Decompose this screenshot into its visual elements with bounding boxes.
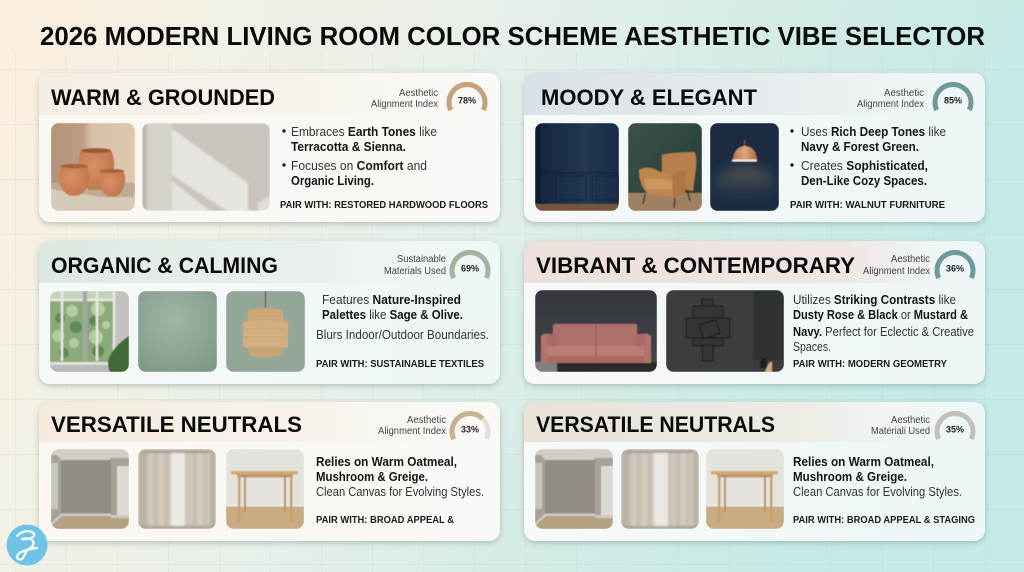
image: geometric wall art (666, 290, 784, 372)
text block: Palettes like Sage & Olive. (322, 308, 463, 322)
panel: vibrant & contemporary (524, 241, 985, 384)
gauge label: Aesthetic (407, 415, 446, 426)
text: bullets: Creates Sophisticated, (801, 159, 928, 173)
gauge label (378, 415, 446, 437)
text: bullets (282, 125, 437, 188)
text: bullets (790, 125, 946, 188)
pair with: PAIR WITH: MODERN GEOMETRY (793, 358, 947, 370)
image: empty room (51, 449, 129, 529)
gauge: 85%: 85% (944, 96, 962, 106)
panel: organic & calming (39, 241, 500, 384)
gauge: 33% (452, 413, 488, 439)
heading: VIBRANT & CONTEMPORARY (536, 253, 855, 278)
header band (524, 73, 985, 115)
pair with: PAIR WITH: BROAD APPEAL & STAGING (793, 514, 975, 526)
text block: Utilizes Striking Contrasts like (793, 293, 956, 307)
text block: Clean Canvas for Evolving Styles. (793, 485, 962, 499)
image: pendant lamp (710, 123, 779, 211)
gauge label: Alignment Index (863, 266, 930, 277)
gauge label (857, 88, 924, 110)
header band (524, 402, 985, 442)
icon: logo badge (6, 524, 48, 566)
panel: versatile neutrals right (524, 402, 985, 541)
text block: Spaces. (793, 340, 831, 354)
text block (793, 293, 974, 354)
gauge label: Aesthetic (884, 88, 924, 99)
gauge label (384, 254, 446, 277)
header band (39, 241, 500, 283)
text block: Clean Canvas for Evolving Styles. (316, 485, 484, 499)
panel: moody & elegant (524, 73, 985, 222)
title: 2026 MODERN LIVING ROOM COLOR SCHEME AESTHETIC VIBE SELECTOR (40, 23, 985, 51)
panel background (39, 241, 500, 384)
text block (316, 293, 489, 342)
text block: Relies on Warm Oatmeal, (316, 455, 457, 469)
image: empty room (535, 449, 613, 529)
gauge label (371, 88, 438, 110)
header band (524, 241, 985, 283)
text: bullets: Focuses on Comfort and (291, 159, 427, 173)
image: rattan pendant (226, 291, 305, 372)
image: sunlit wall (142, 123, 270, 211)
text: bullets: Navy & Forest Green. (801, 140, 919, 154)
gauge label: Alignment Index (378, 426, 446, 437)
gauge: 36% (937, 252, 973, 278)
gauge: 69% (452, 252, 488, 278)
text block: Dusty Rose & Black or Mustard & (793, 308, 968, 322)
gauge: 78% (449, 84, 485, 110)
image: terracotta pots (51, 123, 135, 211)
gauge: 36%: 36% (946, 264, 964, 274)
image: oak table (706, 449, 784, 529)
heading: MOODY & ELEGANT (541, 85, 757, 110)
image: oak table (226, 449, 304, 529)
heading: ORGANIC & CALMING (51, 253, 278, 278)
image: linen curtains (138, 449, 216, 529)
text block: Blurs Indoor/Outdoor Boundaries. (316, 328, 489, 342)
panel: warm & grounded (39, 73, 500, 222)
gauge label: Materials Used (384, 266, 446, 277)
gauge label: Alignment Index (857, 99, 924, 110)
panel background (524, 402, 985, 541)
gauge: 35%: 35% (946, 424, 964, 434)
panel background (39, 73, 500, 222)
heading: VERSATILE NEUTRALS (536, 412, 775, 437)
gauge label (871, 415, 930, 437)
text: bullets: Terracotta & Sienna. (291, 140, 406, 154)
gauge: 85% (935, 84, 971, 110)
pair with: PAIR WITH: BROAD APPEAL & (316, 514, 454, 526)
text block: Mushroom & Greige. (316, 470, 428, 484)
gauge label (863, 254, 930, 277)
gauge: 69%: 69% (461, 264, 479, 274)
gauge label: Aesthetic (399, 88, 438, 99)
text block: Mushroom & Greige. (793, 470, 907, 484)
text block: Relies on Warm Oatmeal, (793, 455, 934, 469)
gauge label: Materiali Used (871, 426, 930, 437)
heading: WARM & GROUNDED (51, 85, 275, 110)
panel: versatile neutrals left (39, 402, 500, 541)
text block: Navy. Perfect for Eclectic & Creative (793, 325, 974, 339)
text: bullets: Organic Living. (291, 174, 374, 188)
text block (793, 455, 962, 499)
gauge label: Sustainable (397, 254, 446, 265)
gauge: 78%: 78% (458, 96, 476, 106)
image: rose sofa (535, 290, 657, 372)
gauge label: Alignment Index (371, 99, 438, 110)
image: linen curtains (621, 449, 699, 529)
heading: VERSATILE NEUTRALS (51, 412, 302, 437)
pair with: PAIR WITH: WALNUT FURNITURE (790, 199, 945, 211)
image: sage wall (138, 291, 217, 372)
header band (39, 73, 500, 115)
gauge label: Aesthetic (891, 415, 930, 426)
pair with: PAIR WITH: SUSTAINABLE TEXTILES (316, 358, 484, 370)
panel background (524, 241, 985, 384)
gauge: 33%: 33% (461, 424, 479, 434)
text block (316, 455, 484, 499)
gauge label: Aesthetic (891, 254, 930, 265)
text: bullets: Den-Like Cozy Spaces. (801, 174, 927, 188)
image: leather armchair (628, 123, 702, 211)
panel background (39, 402, 500, 541)
text: bullets: Uses Rich Deep Tones like (801, 125, 946, 139)
text block: Features Nature-Inspired (322, 293, 461, 307)
gauge: 35% (937, 413, 973, 439)
image: garden window (50, 291, 129, 372)
header band (39, 402, 500, 442)
image: navy panelled wall (535, 123, 619, 211)
panel background (524, 73, 985, 222)
text: bullets: Embraces Earth Tones like (291, 125, 437, 139)
pair with: PAIR WITH: RESTORED HARDWOOD FLOORS (280, 199, 488, 211)
